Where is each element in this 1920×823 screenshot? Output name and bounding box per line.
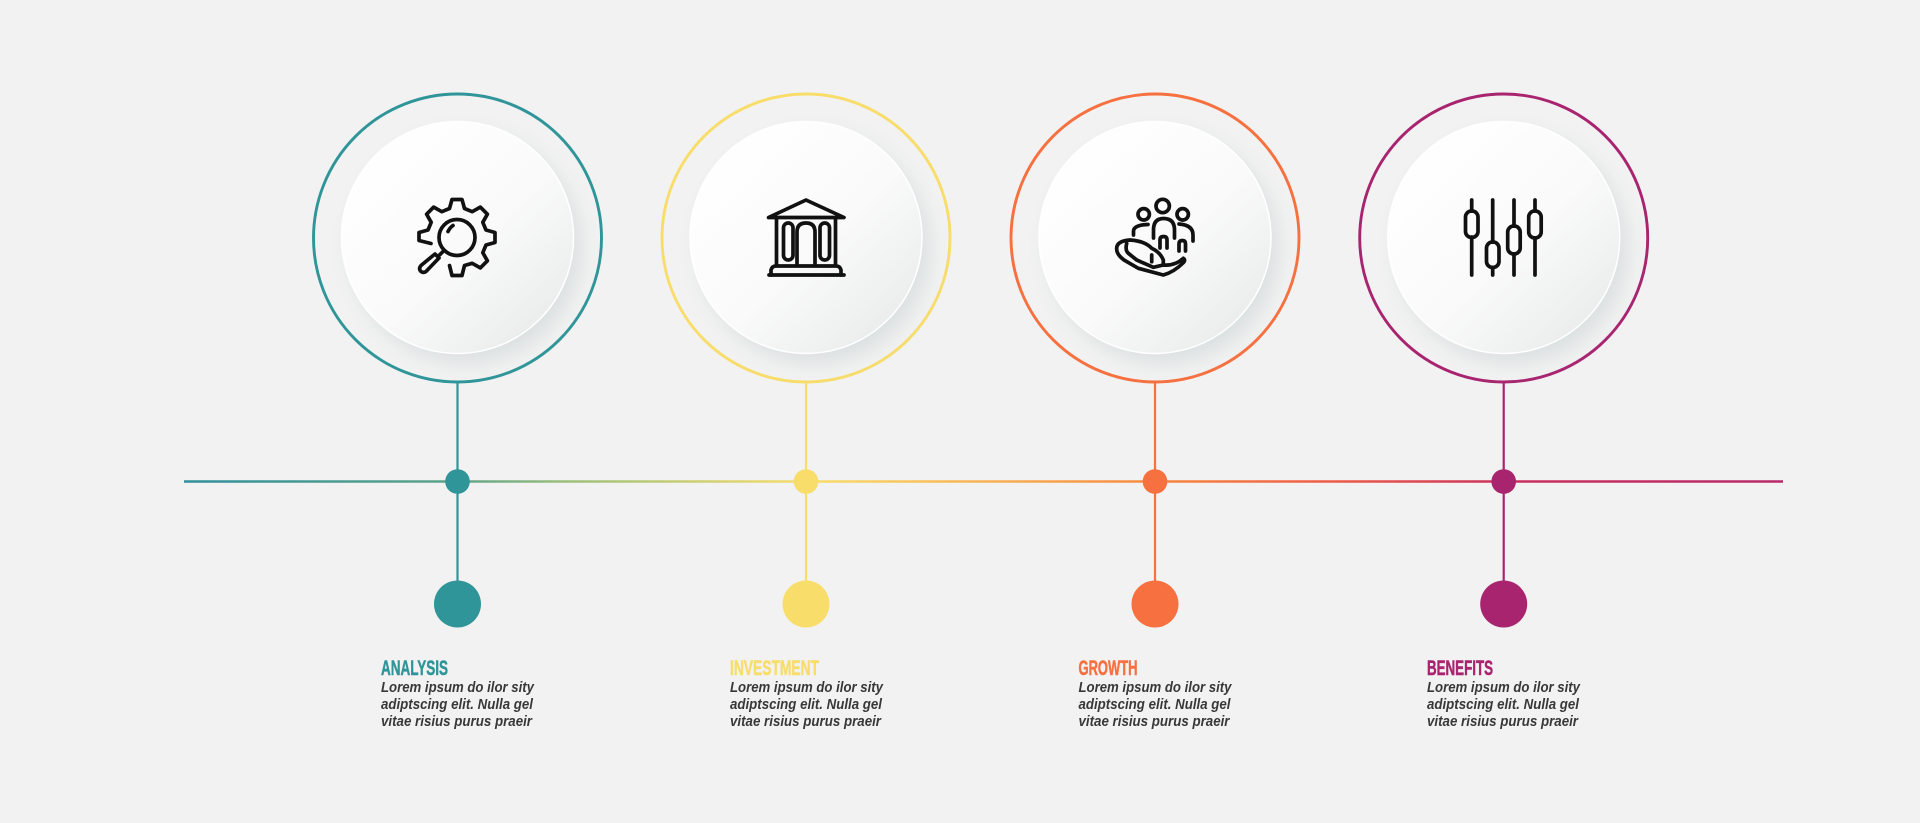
heading: BENEFITS — [1427, 657, 1493, 680]
heading: GROWTH — [1078, 657, 1138, 680]
panel: growth — [1011, 94, 1299, 730]
disc — [1388, 122, 1620, 354]
text block: vitae risius purus praeir — [730, 714, 882, 730]
text block: Lorem ipsum do ilor sity — [381, 680, 535, 696]
disc shadow — [1050, 135, 1276, 361]
outer ring — [314, 94, 602, 382]
connector line — [1503, 382, 1505, 585]
outer ring — [662, 94, 950, 382]
large dot — [1480, 580, 1527, 628]
heading: ANALYSIS — [381, 657, 448, 680]
panel: analysis — [314, 94, 602, 730]
small node — [1143, 469, 1167, 494]
icon: sliders — [1466, 200, 1541, 275]
text block: vitae risius purus praeir — [1427, 714, 1579, 730]
disc — [342, 122, 574, 354]
text block: Lorem ipsum do ilor sity — [1078, 680, 1232, 696]
small node — [794, 469, 818, 494]
icon: bank building — [768, 200, 844, 275]
icon: gear with magnifier — [419, 200, 495, 276]
outer ring — [1360, 94, 1648, 382]
timeline line — [184, 480, 1783, 483]
connector line — [1154, 382, 1156, 585]
text block: adiptscing elit. Nulla gel — [1427, 697, 1580, 713]
panel: benefits — [1360, 94, 1648, 730]
disc shadow — [1399, 135, 1625, 361]
large dot — [1132, 580, 1178, 628]
icon: people over hand — [1117, 199, 1193, 275]
text block: adiptscing elit. Nulla gel — [730, 697, 883, 713]
text block: adiptscing elit. Nulla gel — [1078, 697, 1231, 713]
outer ring — [1011, 94, 1299, 382]
disc shadow — [353, 135, 579, 361]
disc — [690, 122, 922, 354]
connector line — [805, 382, 807, 585]
connector line — [456, 382, 459, 585]
text block: vitae risius purus praeir — [1078, 714, 1231, 730]
text block: adiptscing elit. Nulla gel — [381, 697, 534, 713]
heading: INVESTMENT — [730, 657, 819, 680]
disc — [1039, 122, 1271, 354]
disc shadow — [702, 135, 928, 361]
small node — [1491, 469, 1516, 494]
large dot — [782, 580, 830, 628]
large dot — [434, 580, 481, 628]
text block: vitae risius purus praeir — [381, 714, 533, 730]
text block: Lorem ipsum do ilor sity — [1427, 680, 1581, 696]
small node — [445, 469, 470, 494]
panel: investment — [662, 94, 950, 730]
text block: Lorem ipsum do ilor sity — [730, 680, 884, 696]
